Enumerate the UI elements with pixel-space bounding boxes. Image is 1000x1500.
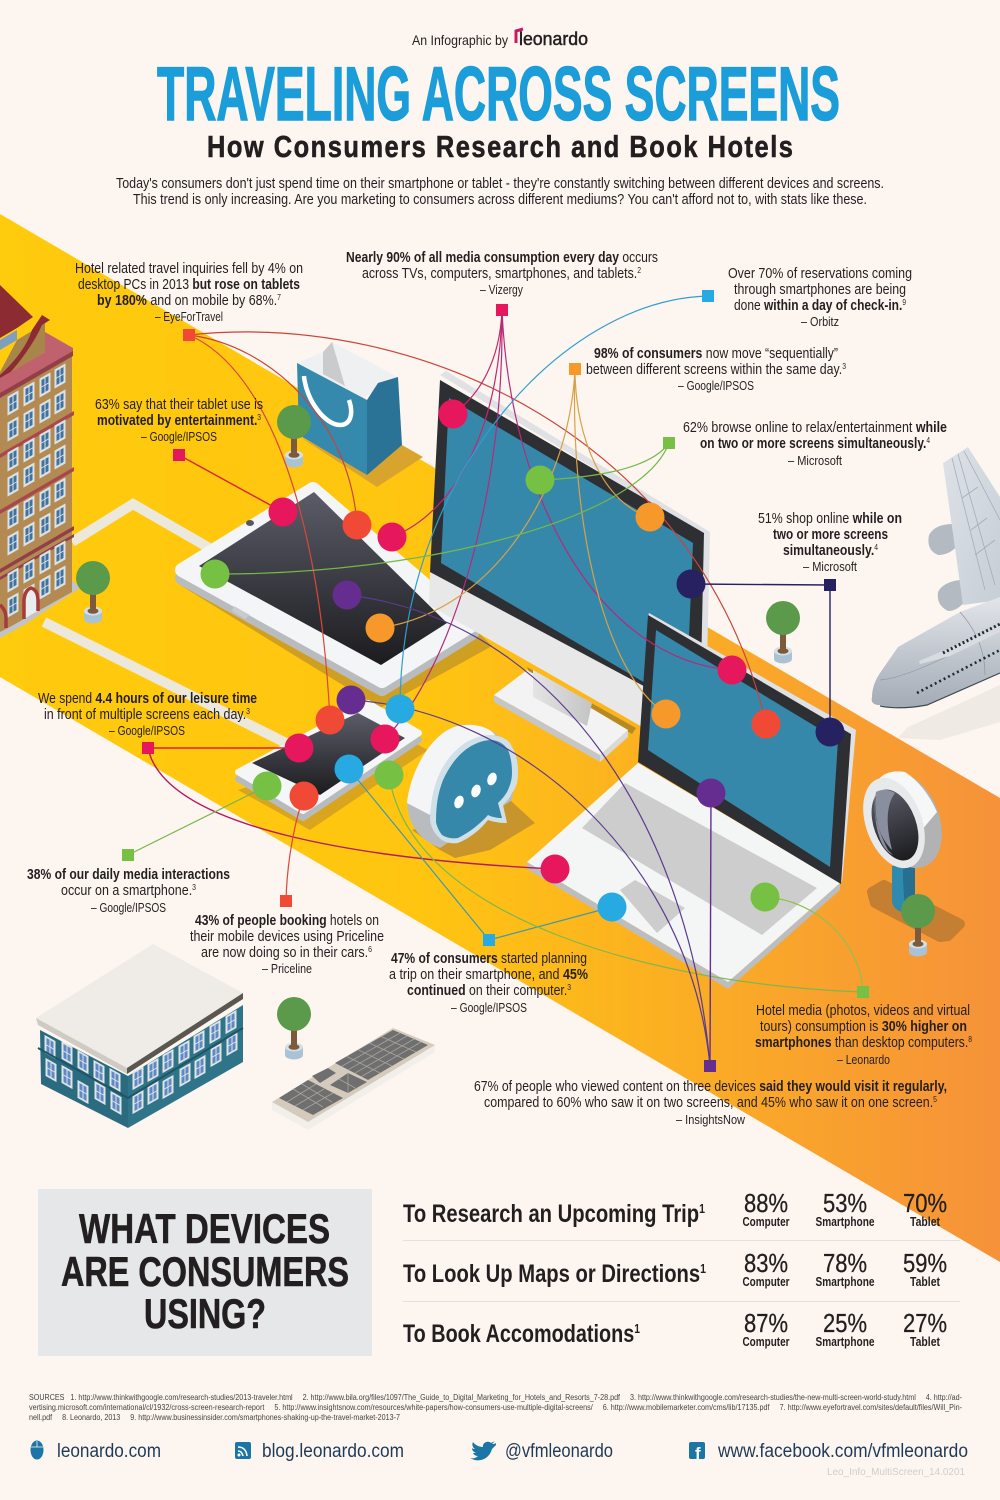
table row: research a trip: Tablet [910,1215,941,1229]
callout: 4.4 hours: – Google/IPSOS [109,724,185,738]
table row: research a trip: Computer [742,1215,790,1229]
callout: 62% browse online: 62% browse online to relax/entertainment while [683,420,947,436]
footer: twitter [470,1441,613,1462]
connector end squares [122,290,869,1072]
callout: 90% of media consumption [346,250,658,297]
table row: research a trip: 1 [699,1201,705,1216]
table row: maps and directions: Computer [742,1275,790,1289]
table row: maps and directions: To Look Up Maps or Directions [403,1260,771,1288]
callout: 43% booking in cars: are now doing so in their cars. [201,945,394,961]
illustration: laptop [527,613,856,989]
callout: 38% of media interactions [27,867,230,915]
sources: nell.pdf 8. Leonardo, 2013 9. http://www.businessinsider.com/smartphones-shaking-up-the-travel-market-2013-7 [29,1413,400,1422]
table row: book accommodations: 27% [903,1308,947,1338]
callout: 38% of media interactions: occur on a smartphone. [61,883,213,899]
illustration: airplane [872,447,1000,740]
callout: hotel media consumption: – Leonardo [837,1053,890,1067]
connector lines [128,296,863,1066]
header byline with logo: leonardo [519,29,588,49]
callout: 4.4 hours: We spend 4.4 hours of our leisure time [38,691,257,707]
callout: 98% of consumers: between different screens within the same day. [586,362,887,378]
callout: hotel travel inquiries: Hotel related travel inquiries fell by 4% on [75,261,303,277]
callout: 70% of reservations: Over 70% of reservations coming [728,266,912,282]
footer: blog: blog.leonardo.com [262,1441,404,1462]
callout: 43% booking in cars: 43% of people booking hotels on [195,913,379,929]
callout: 70% of reservations [728,266,912,329]
callout: hotel travel inquiries: 7 [277,293,281,302]
footer: twitter: @vfmleonardo [505,1441,613,1462]
table row: book accommodations: To Book Accomodations [403,1320,695,1348]
callout: 70% of reservations: – Orbitz [801,315,839,329]
table row: maps and directions: 59% [903,1248,947,1278]
table row: research a trip [403,1188,947,1229]
table row: research a trip: 88% [744,1188,788,1218]
callout: 4.4 hours [38,691,257,738]
callout: 98% of consumers: – Google/IPSOS [678,379,754,393]
table row: maps and directions [403,1248,947,1289]
callout: 51% shop online: two or more screens [773,527,888,543]
table row: maps and directions: 83% [744,1248,788,1278]
illustration: magnifying glass [852,761,960,937]
divider [403,1301,960,1302]
callout: 51% shop online: simultaneously. [783,543,892,559]
walkway lines [44,504,290,745]
callout: 63% tablet use: – Google/IPSOS [141,430,217,444]
callout: hotel travel inquiries: by 180% and on mobile by 68%. [97,293,298,309]
document code: Leo_Info_MultiScreen_14.0201 [827,1467,965,1478]
callout: 98% of consumers [586,346,846,393]
panel: what devices heading: WHAT DEVICES [79,1205,330,1252]
table row: research a trip: To Research an Upcoming Trip [403,1200,769,1228]
intro text [116,176,884,208]
table row: maps and directions: 1 [700,1261,706,1276]
callout: hotel media consumption [755,1003,972,1067]
footer: facebook: www.facebook.com/vfmleonardo [717,1441,968,1462]
table row: book accommodations [403,1308,947,1349]
callout: 98% of consumers: 98% of consumers now move “sequentially” [594,346,838,362]
callout: 47% started planning: continued on their computer. [407,983,586,999]
callout: 51% shop online: – Microsoft [803,560,857,574]
table row: book accommodations: Smartphone [816,1335,875,1349]
icon: tree by magnifier [901,894,935,956]
callout: 62% browse online: – Microsoft [788,454,842,468]
callout: 90% of media consumption: – Vizergy [480,283,524,297]
callout: 63% tablet use: 63% say that their tablet use is [95,397,263,413]
callout: 47% started planning: a trip on their smartphone, and 45% [389,967,588,983]
table row: book accommodations: 1 [634,1321,640,1336]
panel: what devices heading: USING? [144,1290,266,1337]
table row: research a trip: 53% [823,1188,867,1218]
callout: 98% of consumers: 3 [842,362,846,371]
callout: 51% shop online: 4 [874,543,878,552]
callout: 47% started planning: – Google/IPSOS [451,1001,527,1015]
callout: 67% three devices [474,1079,947,1127]
divider [403,1240,960,1241]
table row: maps and directions: Smartphone [816,1275,875,1289]
table row: research a trip: 70% [903,1188,947,1218]
callout: 67% three devices: 67% of people who viewed content on three devices said they would visit it regularly, [474,1079,947,1095]
header byline with logo: An Infographic by [412,32,508,48]
callout: 43% booking in cars: – Priceline [262,962,312,976]
illustration: keyboard [272,1028,435,1130]
callout: hotel travel inquiries: – EyeForTravel [155,310,223,324]
callout: 43% booking in cars: 6 [368,945,372,954]
callout: 47% started planning [389,951,588,1015]
callout: hotel media consumption: tours) consumption is 30% higher on [760,1019,967,1035]
illustration: phone [238,703,428,830]
callout: 90% of media consumption: 2 [637,266,641,275]
table row: book accommodations: 87% [744,1308,788,1338]
callout: 70% of reservations: through smartphones are being [734,282,906,298]
callout: 47% started planning: 47% of consumers started planning [391,951,587,967]
data point circles [200,400,844,922]
footer: facebook: f [695,1444,701,1463]
panel: what devices heading: ARE CONSUMERS [61,1248,349,1295]
intro text: This trend is only increasing. Are you marketing to consumers across different mediums? You can't afford not to, with stats like these. [133,192,867,208]
callout: 70% of reservations: 9 [902,298,906,307]
table row: book accommodations: Computer [742,1335,790,1349]
panel: what devices heading [38,1189,372,1356]
illustration: tall hotel [0,285,80,638]
callout: 67% three devices: 5 [933,1095,937,1104]
table row: book accommodations: Tablet [910,1335,941,1349]
callout: hotel media consumption: Hotel media (photos, videos and virtual [756,1003,970,1019]
diagonal colour band [0,214,1000,1262]
callout: 63% tablet use: motivated by entertainment. [97,413,290,429]
callout: 38% of media interactions: 3 [192,883,196,892]
icon: tree by bag [277,405,311,468]
callout: 67% three devices: – InsightsNow [676,1113,746,1127]
callout: 90% of media consumption: Nearly 90% of all media consumption every day occurs [346,250,658,266]
icon: tree by monitor [766,601,800,664]
callout: 67% three devices: compared to 60% who saw it on two screens, and 45% who saw it on one screen. [484,1095,1000,1111]
sources [29,1393,962,1422]
callout: 62% browse online: on two or more screens simultaneously. [700,436,926,452]
table row: maps and directions: Tablet [910,1275,941,1289]
callout: 47% started planning: 3 [567,983,571,992]
illustration: chat bubble [407,725,535,858]
icon: tree near hotel [76,561,110,624]
callout: 43% booking in cars [190,913,384,976]
illustration: tablet [180,489,492,708]
callout: 62% browse online: 4 [926,436,930,445]
illustration: low teal building [36,944,243,1128]
callout: 62% browse online [683,420,947,468]
callout: 63% tablet use: 3 [257,413,261,422]
table row: book accommodations: 25% [823,1308,867,1338]
callout: hotel media consumption: 8 [968,1035,972,1044]
illustration: desktop monitor [429,371,710,762]
callout: 38% of media interactions: 38% of our daily media interactions [27,867,230,883]
callout: 63% tablet use [95,397,263,444]
callout: 43% booking in cars: their mobile devices using Priceline [190,929,384,945]
icon: tree by low building [277,997,311,1060]
illustration: shopping bag [297,342,423,487]
footer: website: leonardo.com [57,1441,161,1462]
callout: 51% shop online: 51% shop online while on [758,511,902,527]
intro text: Today's consumers don't just spend time on their smartphone or tablet - they're constantly switching between different devices and screens. [116,176,884,192]
subtitle: How Consumers Research and Book Hotels [207,130,793,165]
callout: 70% of reservations: done within a day of check-in. [734,298,932,314]
callout: hotel travel inquiries: desktop PCs in 2013 but rose on tablets [78,277,300,293]
callout: 51% shop online [758,511,902,574]
callout: 4.4 hours: 3 [246,707,250,716]
header byline with logo [412,29,588,49]
callout: hotel travel inquiries [75,261,303,324]
callout: hotel media consumption: smartphones than desktop computers. [755,1035,994,1051]
table row: maps and directions: 78% [823,1248,867,1278]
table row: research a trip: Smartphone [816,1215,875,1229]
callout: 90% of media consumption: across TVs, computers, smartphones, and tablets. [362,266,685,282]
callout: 38% of media interactions: – Google/IPSOS [91,901,166,915]
callout: 4.4 hours: in front of multiple screens each day. [44,707,279,723]
